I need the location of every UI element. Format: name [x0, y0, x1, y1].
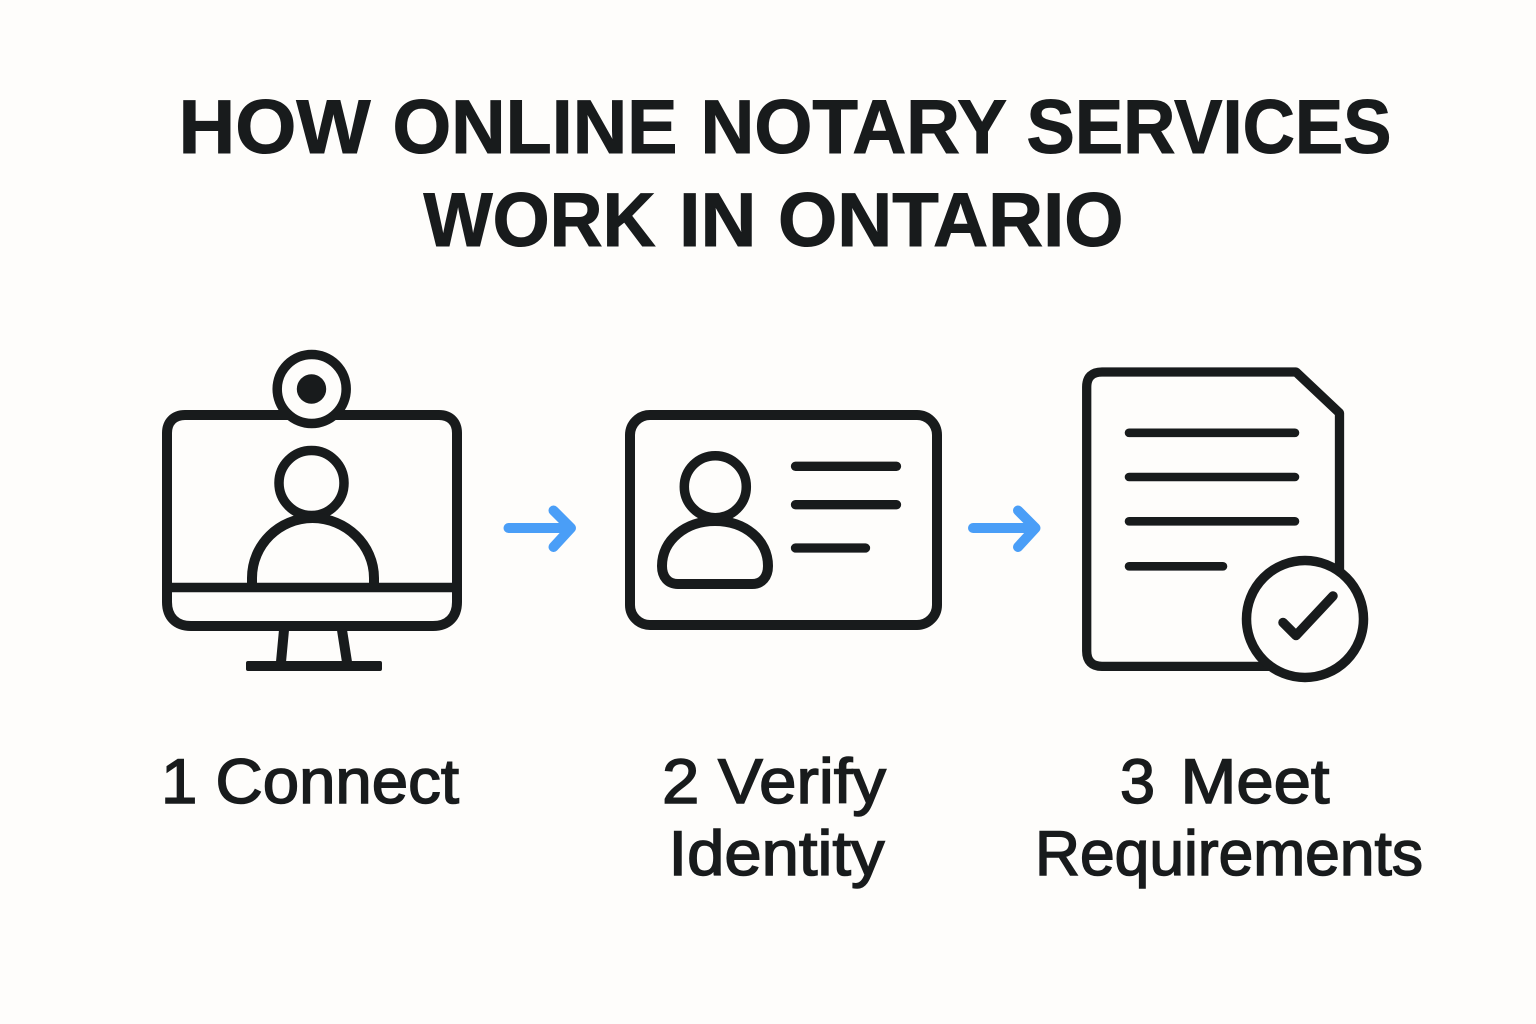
label: step 2	[662, 747, 887, 889]
label: step 3: 3	[1120, 747, 1155, 817]
label: step 1: 1 Connect	[161, 747, 460, 817]
label: step 3: Requirements	[1035, 819, 1423, 889]
icon: identity card	[630, 415, 937, 625]
icon: computer monitor with webcam and person	[167, 354, 457, 671]
label: step 3: Meet	[1180, 747, 1330, 817]
title: ONTARIO	[778, 178, 1124, 263]
label: step 2: 2 Verify	[662, 747, 887, 817]
icon: document with check mark	[1087, 372, 1364, 678]
label: step 3	[1035, 747, 1423, 889]
label: step 2: Identity	[668, 819, 885, 889]
title: HOW	[178, 85, 371, 170]
title: IN	[679, 178, 756, 263]
title: NOTARY	[700, 85, 1007, 170]
arrow: step 2 to step 3	[973, 510, 1036, 547]
title: SERVICES	[1026, 85, 1392, 170]
title	[178, 85, 1392, 263]
arrow: step 1 to step 2	[508, 510, 571, 547]
title: WORK	[424, 178, 656, 263]
title: ONLINE	[392, 85, 678, 170]
